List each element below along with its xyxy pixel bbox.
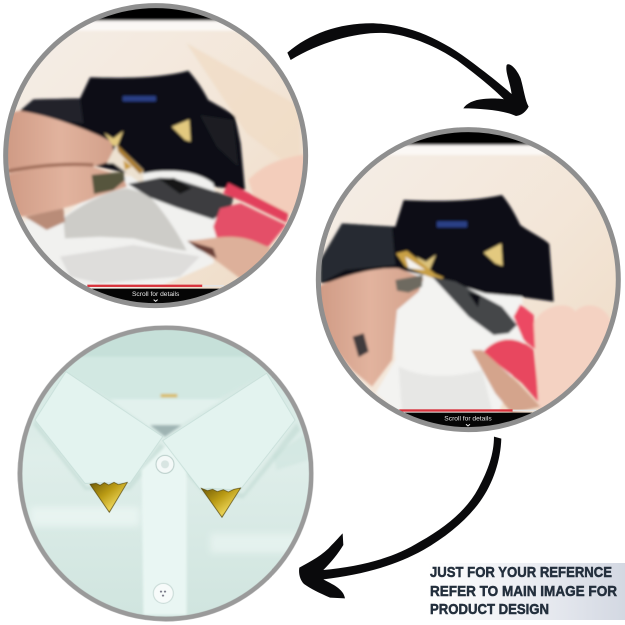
white fabric (23, 171, 220, 290)
right collar flap (163, 373, 295, 490)
note text line 3: PRODUCT DESIGN (430, 601, 549, 618)
ring (353, 333, 369, 357)
video progress bar (404, 412, 532, 428)
painted nail (92, 172, 125, 194)
top video bar (93, 8, 218, 22)
left gold collar tip (90, 482, 127, 512)
step 2 photo circle (312, 120, 624, 440)
black shirt (320, 195, 554, 302)
black shirt (13, 71, 245, 190)
pliers (432, 277, 517, 335)
pliers (128, 178, 233, 219)
gold tips on black shirt (484, 243, 503, 266)
gold collar tip held (107, 144, 143, 185)
scroll caption: Scroll for details (444, 416, 492, 423)
step 3 finished white shirt circle (10, 320, 322, 625)
video progress bar (92, 288, 220, 304)
reference note (428, 563, 625, 620)
arrow: step 2 to step 3 (299, 437, 501, 598)
red handles (223, 183, 288, 223)
collar button (156, 455, 174, 473)
right hand (534, 305, 614, 410)
white fabric (375, 270, 525, 413)
right hand (248, 154, 308, 213)
step 1 photo circle (0, 0, 312, 312)
wrong-side gold tips on black shirt (172, 119, 191, 142)
shirt placket (142, 445, 187, 615)
holding hand (317, 268, 424, 387)
painted nail (395, 275, 423, 293)
gold collar tip held (396, 251, 444, 281)
scroll caption: Scroll for details (132, 291, 180, 298)
red handles (514, 304, 536, 350)
arrow: step 1 to step 2 (287, 23, 529, 116)
left collar flap (35, 372, 163, 483)
soft fabric folds (30, 507, 140, 527)
lower button (153, 583, 173, 603)
top video bar (406, 132, 531, 146)
right gold collar tip (201, 488, 241, 517)
holding hand (5, 111, 115, 173)
inner collar band (84, 330, 248, 356)
